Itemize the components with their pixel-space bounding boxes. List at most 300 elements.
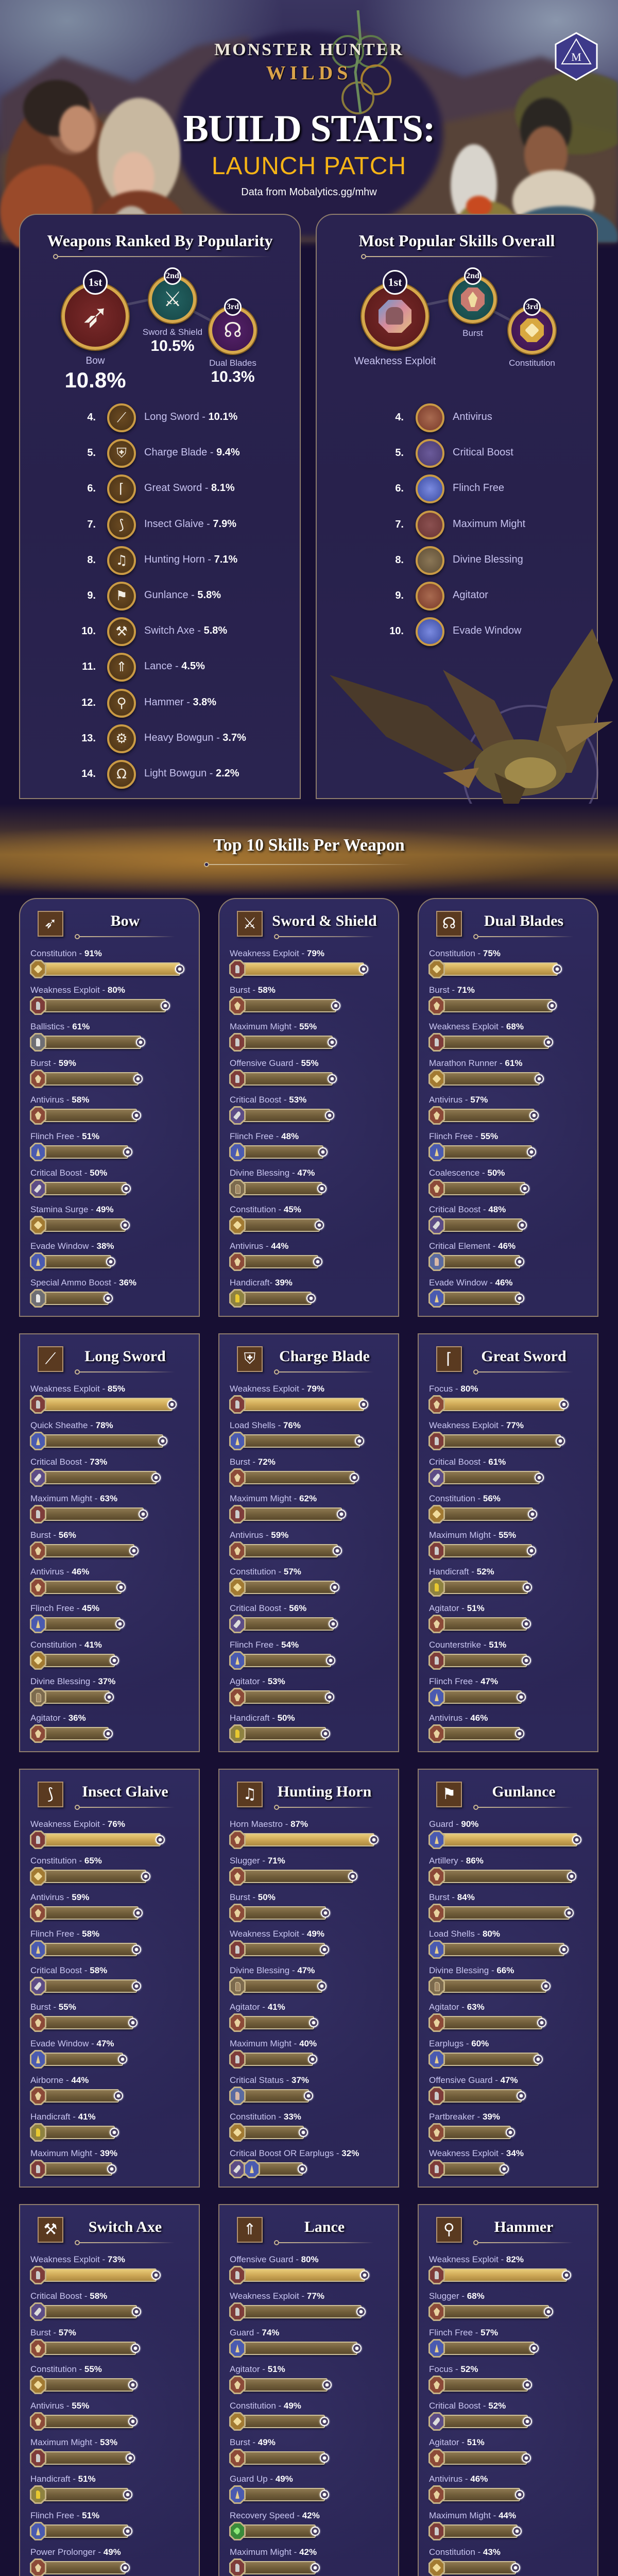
skill row: Maximum Might 42%: Maximum Might - 42%	[230, 2547, 317, 2557]
title divider	[55, 256, 271, 257]
skill row: Evade Window 47%	[20, 2038, 199, 2070]
rank 8: Divine Blessing: 8.	[395, 554, 404, 566]
skill row: Flinch Free 54%: Flinch Free - 54%	[230, 1640, 299, 1650]
podium 3rd: Constitution: 3rd	[526, 302, 538, 311]
skill row: Critical Boost OR Earplugs 32%	[219, 2147, 398, 2179]
rank 5: Charge Blade: ⛨	[116, 446, 127, 461]
skill row: Slugger 68%: Slugger - 68%	[429, 2291, 485, 2301]
skill row: Stamina Surge 49%: Stamina Surge - 49%	[30, 1205, 114, 1214]
skill row: Load Shells 80%	[419, 1928, 597, 1960]
rank 13: Heavy Bowgun: 13.	[81, 733, 96, 744]
skill row: Weakness Exploit 79%	[219, 1383, 398, 1415]
skill row: Power Prolonger 49%: Power Prolonger - 49%	[30, 2547, 121, 2557]
skill row: Burst 58%	[229, 985, 342, 1015]
podium 1st: Weakness Exploit: 1st	[388, 276, 402, 289]
weapon icon: ⌈	[446, 1350, 452, 1368]
rank 12: Hammer: 12.	[81, 697, 96, 708]
skill row: Burst 50%: Burst - 50%	[230, 1892, 276, 1902]
rank 4: Long Sword: 4.	[87, 412, 96, 423]
skill row: Weakness Exploit 73%	[20, 2253, 199, 2285]
rank 7: Maximum Might: 7.	[395, 519, 404, 530]
podium 2nd: Sword & Shield: 2nd	[166, 272, 179, 280]
skill row: Handicraft 39%	[219, 1277, 398, 1309]
rank 7: Insect Glaive: ⟆	[119, 517, 124, 533]
skill row: Flinch Free 51%: Flinch Free - 51%	[30, 1131, 99, 1141]
weapon title: Insect Glaive	[82, 1783, 168, 1800]
rank 9: Agitator: Agitator	[453, 589, 488, 601]
skill row: Critical Boost 53%: Critical Boost - 53%	[230, 1095, 306, 1105]
rank 9: Agitator: 9.	[395, 590, 404, 601]
skill row: Antivirus 46%: Antivirus - 46%	[429, 1713, 488, 1723]
skill row: Flinch Free 57%	[419, 2327, 597, 2359]
skill row: Maximum Might 62%	[219, 1493, 398, 1524]
panel: Bow	[19, 898, 200, 1317]
skill row: Antivirus 44%	[229, 1241, 323, 1271]
panel: Long Sword	[19, 1333, 200, 1752]
rank 8: Hunting Horn: Hunting Horn - 7.1%	[144, 554, 237, 565]
weapon icon: ☊	[442, 914, 456, 933]
section heading: top 10 skills per weapon: Top 10 Skills Per Weapon	[213, 836, 405, 855]
skill row: Agitator 53%: Agitator - 53%	[230, 1676, 285, 1686]
rank 5: Charge Blade: 5.	[87, 447, 96, 459]
skill row: Divine Blessing 66%	[419, 1964, 597, 1996]
skill row: Burst 55%: Burst - 55%	[30, 2002, 76, 2012]
skill row: Burst 84%: Burst - 84%	[429, 1892, 475, 1902]
skill row: Slugger 68%	[419, 2290, 597, 2322]
skill row: Offensive Guard 55%: Offensive Guard - 55%	[230, 1058, 319, 1068]
rank 5: Critical Boost: 5.	[395, 447, 404, 459]
weapon icon	[436, 2217, 462, 2243]
skill row: Flinch Free 58%: Flinch Free - 58%	[30, 1929, 99, 1939]
skill row: Constitution 91%	[30, 948, 185, 978]
skill row: Constitution 43%	[419, 2546, 597, 2576]
skill row: Maximum Might 53%: Maximum Might - 53%	[30, 2437, 117, 2447]
rank 4: Long Sword: Long Sword - 10.1%	[144, 411, 237, 422]
skill row: Burst 71%: Burst - 71%	[429, 985, 475, 995]
skill row: Antivirus 58%: Antivirus - 58%	[30, 1095, 89, 1105]
skill row: Guard Up 49%	[219, 2473, 398, 2505]
skill row: Critical Boost 58%: Critical Boost - 58%	[30, 1965, 107, 1975]
skill row: Coalescence 50%	[419, 1167, 597, 1199]
skill row: Handicraft 51%: Handicraft - 51%	[30, 2474, 96, 2484]
skill row: Antivirus 59%: Antivirus - 59%	[230, 1530, 288, 1540]
skill row: Burst 50%	[219, 1891, 398, 1923]
weapon icon	[38, 911, 63, 937]
skill row: Constitution 33%: Constitution - 33%	[230, 2112, 301, 2122]
skill row: Agitator 36%	[20, 1712, 199, 1744]
skill row: Divine Blessing 37%: Divine Blessing - 37%	[30, 1676, 115, 1686]
skill row: Agitator 51%: Agitator - 51%	[230, 2364, 285, 2374]
rank 4: Antivirus: Antivirus	[453, 411, 492, 422]
skill row: Guard 90%	[419, 1818, 597, 1850]
skill row: Constitution 33%	[219, 2111, 398, 2143]
skill row: Handicraft 52%	[419, 1566, 597, 1598]
skill row: Coalescence 50%: Coalescence - 50%	[429, 1168, 505, 1178]
skill row: Ballistics 61%	[30, 1022, 146, 1052]
skill row: Critical Boost 50%: Critical Boost - 50%	[30, 1168, 107, 1178]
weapon title: Long Sword	[84, 1348, 166, 1365]
panel: weapons ranked by popularity	[19, 214, 301, 799]
skill row: Antivirus 46%	[419, 1712, 597, 1744]
rank 8: Hunting Horn	[87, 546, 237, 578]
skill row: Constitution 55%: Constitution - 55%	[30, 2364, 102, 2374]
skill row: Critical Boost 56%: Critical Boost - 56%	[230, 1603, 306, 1613]
skill row: Flinch Free 51%	[20, 2510, 199, 2541]
header background scene	[0, 0, 618, 242]
skill row: Critical Boost 56%	[219, 1602, 398, 1634]
skill row: Critical Boost 58%: Critical Boost - 58%	[30, 2291, 107, 2301]
weapon icon: ⇑	[243, 2221, 256, 2239]
podium 1st: Bow: 10.8%	[64, 368, 126, 392]
rank 9: Gunlance: ⚑	[115, 588, 128, 604]
skill row: Weakness Exploit 68%: Weakness Exploit - 68%	[429, 1022, 524, 1031]
podium 2nd: Sword & Shield: 10.5%	[150, 337, 195, 354]
skill row: Weakness Exploit 77%	[219, 2290, 398, 2322]
rank 10: Evade Window: Evade Window	[453, 625, 521, 636]
skill row: Flinch Free 51%	[30, 1131, 134, 1161]
skill row: Antivirus 46%: Antivirus - 46%	[429, 2474, 488, 2484]
rank 7: Insect Glaive: 7.	[87, 519, 96, 530]
skill row: Critical Boost 73%: Critical Boost - 73%	[30, 1457, 107, 1467]
rank 6: Great Sword: 6.	[87, 483, 96, 494]
rank 7: Insect Glaive	[87, 511, 236, 542]
rank 5: Critical Boost: Critical Boost	[453, 447, 513, 458]
skill row: Burst 49%	[219, 2436, 398, 2468]
skill row: Load Shells 80%: Load Shells - 80%	[429, 1929, 500, 1939]
rank 10: Evade Window: 10.	[389, 625, 404, 637]
weapon title: Switch Axe	[89, 2218, 162, 2235]
skill row: Agitator 51%	[419, 2436, 597, 2468]
podium 2nd: Sword & Shield	[143, 267, 202, 354]
podium 2nd: Sword & Shield: Sword & Shield	[143, 327, 202, 337]
skill row: Critical Element 46%	[419, 1240, 597, 1272]
skill row: Burst 59%	[30, 1058, 144, 1088]
title: Monster Hunter Wilds logo text: MONSTER HUNTER	[214, 40, 404, 59]
skill row: Agitator 36%: Agitator - 36%	[30, 1713, 86, 1723]
podium 3rd: Constitution: Constitution	[509, 358, 555, 368]
rank 7: Maximum Might: Maximum Might	[453, 518, 525, 530]
skill row: Burst 84%	[419, 1891, 597, 1923]
rank 11: Lance: ⇑	[116, 659, 127, 675]
skill row: Maximum Might 63%	[20, 1493, 199, 1524]
weapon icon	[38, 1782, 63, 1807]
skill row: Ballistics 61%: Ballistics - 61%	[30, 1022, 90, 1031]
weapon icon	[436, 911, 462, 937]
rank 13: Heavy Bowgun	[20, 723, 300, 754]
skill row: Maximum Might 40%	[219, 2038, 398, 2070]
rank 9: Gunlance: Gunlance - 5.8%	[144, 589, 221, 601]
skill row: Burst 72%	[219, 1456, 398, 1488]
podium 3rd: Constitution	[506, 298, 558, 368]
skill row: Burst 57%: Burst - 57%	[30, 2328, 76, 2337]
skill row: Constitution 45%	[229, 1205, 325, 1234]
skill row: Agitator 41%	[219, 2001, 398, 2033]
skill row: Divine Blessing 47%	[219, 1964, 398, 1996]
weapon icon	[436, 1346, 462, 1372]
weapon title: Lance	[304, 2218, 345, 2235]
skill row: Recovery Speed 42%: Recovery Speed - 42%	[230, 2511, 320, 2520]
grassland backdrop	[0, 804, 618, 896]
weapon icon: ⚒	[44, 2221, 57, 2239]
rank 5: Charge Blade	[87, 439, 240, 471]
skill row: Airborne 44%	[20, 2074, 199, 2106]
skill row: Constitution 57%	[219, 1566, 398, 1598]
skill row: Weakness Exploit 77%: Weakness Exploit - 77%	[230, 2291, 324, 2301]
skill row: Handicraft 41%	[20, 2111, 199, 2143]
weapon icon	[237, 1346, 263, 1372]
skill row: Antivirus 55%	[20, 2400, 199, 2432]
panel: Great Sword	[418, 1333, 598, 1752]
skill row: Artillery 86%: Artillery - 86%	[429, 1856, 484, 1866]
skill row: Handicraft 51%	[20, 2473, 199, 2505]
subheading: Launch Patch: LAUNCH PATCH	[212, 152, 406, 180]
skill row: Burst 72%: Burst - 72%	[230, 1457, 276, 1467]
weapon icon: ⟋	[45, 1350, 56, 1368]
skill row: Load Shells 76%	[219, 1419, 398, 1451]
podium 3rd: Dual Blades: Dual Blades	[209, 358, 256, 368]
skill row: Artillery 86%	[419, 1855, 597, 1887]
character art: left hunters	[0, 78, 183, 249]
skill row: Special Ammo Boost 36%	[30, 1278, 136, 1308]
skill row: Flinch Free 48%	[229, 1131, 329, 1161]
rank 8: Divine Blessing: Divine Blessing	[453, 554, 523, 565]
rank 10: Switch Axe	[81, 617, 227, 649]
skill row: Maximum Might 55%: Maximum Might - 55%	[429, 1530, 516, 1540]
skill row: Weakness Exploit 82%: Weakness Exploit - 82%	[429, 2255, 524, 2264]
skill row: Burst 58%: Burst - 58%	[230, 985, 276, 995]
skill row: Maximum Might 40%: Maximum Might - 40%	[230, 2039, 317, 2048]
skill row: Weakness Exploit 77%: Weakness Exploit - 77%	[429, 1420, 524, 1430]
rank 8: Hunting Horn: 8.	[87, 554, 96, 566]
panel: Insect Glaive	[19, 1769, 200, 2188]
skill row: Weakness Exploit 80%	[30, 985, 171, 1015]
skill row: Maximum Might 62%: Maximum Might - 62%	[230, 1494, 317, 1503]
panel: Hammer	[418, 2204, 598, 2576]
rank 11: Lance: Lance - 4.5%	[144, 660, 205, 672]
skill row: Quick Sheathe 78%	[20, 1419, 199, 1451]
icon: mobalytics logo	[555, 32, 597, 81]
panel: Dual Blades	[418, 898, 598, 1317]
skill row: Counterstrike 51%	[419, 1639, 597, 1671]
skill row: Critical Boost 53%	[229, 1095, 336, 1125]
skill row: Maximum Might 42%	[219, 2546, 398, 2576]
skill row: Antivirus 46%	[20, 1566, 199, 1598]
skill row: Maximum Might 53%	[20, 2436, 199, 2468]
skill row: Maximum Might 55%: Maximum Might - 55%	[230, 1022, 317, 1031]
heading divider	[206, 864, 412, 865]
connector lines	[317, 215, 599, 369]
rank 10: Switch Axe: Switch Axe - 5.8%	[144, 625, 227, 636]
rank 10: Switch Axe: 10.	[81, 625, 96, 637]
skill row: Constitution 45%: Constitution - 45%	[230, 1205, 301, 1214]
podium 3rd: Dual Blades: 3rd	[227, 302, 239, 311]
skill row: Horn Maestro 87%: Horn Maestro - 87%	[230, 1819, 308, 1829]
weapon icon: ⛨	[244, 1350, 255, 1368]
skill row: Recovery Speed 42%	[219, 2510, 398, 2541]
skill row: Slugger 71%: Slugger - 71%	[230, 1856, 285, 1866]
skill row: Handicraft 52%: Handicraft - 52%	[429, 1567, 494, 1577]
skill row: Antivirus 46%	[419, 2473, 597, 2505]
skill row: Marathon Runner 61%: Marathon Runner - 61%	[429, 1058, 522, 1068]
skill row: Constitution 49%: Constitution - 49%	[230, 2401, 301, 2411]
icon: mobalytics logo: M	[571, 50, 581, 63]
skill row: Quick Sheathe 78%: Quick Sheathe - 78%	[30, 1420, 113, 1430]
skill row: Evade Window 38%: Evade Window - 38%	[30, 1241, 114, 1251]
skill row: Constitution 56%	[419, 1493, 597, 1524]
skill row: Handicraft 39%: Handicraft- 39%	[230, 1278, 293, 1287]
rank 6: Great Sword	[87, 474, 235, 506]
rank 11: Lance	[82, 653, 205, 684]
rank 11: Lance: 11.	[82, 661, 96, 672]
skill row: Load Shells 76%: Load Shells - 76%	[230, 1420, 301, 1430]
rank 9: Gunlance	[87, 582, 221, 613]
podium 3rd: Dual Blades	[207, 298, 259, 385]
skill row: Weakness Exploit 80%: Weakness Exploit - 80%	[30, 985, 125, 995]
skill row: Earplugs 60%: Earplugs - 60%	[429, 2039, 489, 2048]
skill row: Burst 56%	[20, 1529, 199, 1561]
skill row: Maximum Might 39%: Maximum Might - 39%	[30, 2148, 117, 2158]
skill row: Constitution 41%	[20, 1639, 199, 1671]
skill row: Flinch Free 58%	[20, 1928, 199, 1960]
podium 1st: Bow: ➶	[81, 297, 109, 335]
skill row: Divine Blessing 47%: Divine Blessing - 47%	[230, 1168, 315, 1178]
skill row: Maximum Might 44%: Maximum Might - 44%	[429, 2511, 516, 2520]
rank 14: Light Bowgun: Light Bowgun - 2.2%	[144, 768, 239, 779]
rank 9: Gunlance: 9.	[87, 590, 96, 601]
skill row: Weakness Exploit 73%: Weakness Exploit - 73%	[30, 2255, 125, 2264]
podium 1st: Bow: Bow	[86, 355, 105, 366]
skill row: Constitution 91%: Constitution - 91%	[30, 948, 102, 958]
skill row: Constitution 56%: Constitution - 56%	[429, 1494, 501, 1503]
heading: Build Stats: BUILD STATS:	[183, 108, 435, 150]
weapon title: Sword & Shield	[272, 912, 377, 929]
skill row: Earplugs 60%	[419, 2038, 597, 2070]
skill row: Weakness Exploit 68%	[419, 1021, 597, 1053]
rank 6: Flinch Free	[317, 473, 597, 504]
panel: Charge Blade	[218, 1333, 399, 1752]
skill row: Critical Boost 58%	[20, 1964, 199, 1996]
skill row: Burst 56%: Burst - 56%	[30, 1530, 76, 1540]
skill row: Antivirus 58%	[30, 1095, 142, 1125]
weapon icon: ♫	[243, 1785, 256, 1803]
rank 6: Great Sword: ⌈	[119, 481, 124, 497]
panel: Hunting Horn	[218, 1769, 399, 2188]
skill row: Guard Up 49%: Guard Up - 49%	[230, 2474, 293, 2484]
rank 8: Hunting Horn: ♫	[115, 553, 128, 568]
skill row: Antivirus 46%: Antivirus - 46%	[30, 1567, 89, 1577]
skill row: Handicraft 41%: Handicraft - 41%	[30, 2112, 96, 2122]
skill row: Constitution 49%	[219, 2400, 398, 2432]
skill row: Weakness Exploit 79%	[229, 948, 370, 978]
weapon title: Dual Blades	[484, 912, 563, 929]
skill row: Agitator 53%	[219, 1675, 398, 1707]
skill row: Constitution 55%	[20, 2363, 199, 2395]
rank 5: Critical Boost	[317, 438, 597, 469]
skill row: Critical Boost 52%	[419, 2400, 597, 2432]
rank 4: Antivirus: 4.	[395, 412, 404, 423]
rank 7: Insect Glaive: Insect Glaive - 7.9%	[144, 518, 236, 530]
title divider	[363, 256, 554, 257]
panel: Lance	[218, 2204, 399, 2576]
skill row: Maximum Might 39%	[20, 2147, 199, 2179]
skill row: Maximum Might 63%: Maximum Might - 63%	[30, 1494, 117, 1503]
skill row: Handicraft 50%	[219, 1712, 398, 1744]
skill row: Agitator 51%	[419, 1602, 597, 1634]
skill row: Offensive Guard 47%	[419, 2074, 597, 2106]
skill row: Critical Status 37%	[219, 2074, 398, 2106]
rank 9: Agitator	[317, 581, 597, 612]
skill row: Burst 57%	[20, 2327, 199, 2359]
podium 1st: Bow: 1st	[89, 276, 102, 289]
title: Wilds: WILDS	[266, 62, 352, 84]
skill row: Constitution 65%: Constitution - 65%	[30, 1856, 102, 1866]
skill row: Flinch Free 55%: Flinch Free - 55%	[429, 1131, 498, 1141]
skill row: Critical Element 46%: Critical Element - 46%	[429, 1241, 516, 1251]
skill row: Guard 90%: Guard - 90%	[429, 1819, 478, 1829]
weapon icon	[237, 2217, 263, 2243]
skill row: Critical Boost 52%: Critical Boost - 52%	[429, 2401, 506, 2411]
skill row: Burst 71%	[419, 984, 597, 1016]
skill row: Focus 52%	[419, 2363, 597, 2395]
skill row: Offensive Guard 47%: Offensive Guard - 47%	[429, 2075, 518, 2085]
rank 10: Switch Axe: ⚒	[115, 624, 128, 639]
weapon title: Bow	[111, 912, 140, 929]
weapon icon: ➶	[44, 914, 57, 933]
skill row: Flinch Free 57%: Flinch Free - 57%	[429, 2328, 498, 2337]
skill row: Constitution 75%: Constitution - 75%	[429, 948, 501, 958]
skill row: Weakness Exploit 77%	[419, 1419, 597, 1451]
skill row: Constitution 75%	[419, 947, 597, 979]
skill row: Flinch Free 47%	[419, 1675, 597, 1707]
skill row: Agitator 51%	[219, 2363, 398, 2395]
podium 2nd: Sword & Shield: ⚔	[163, 287, 182, 311]
skill row: Special Ammo Boost 36%: Special Ammo Boost - 36%	[30, 1278, 136, 1287]
rank 12: Hammer	[20, 688, 300, 719]
skill row: Flinch Free 47%: Flinch Free - 47%	[429, 1676, 498, 1686]
skill row: Handicraft 50%: Handicraft - 50%	[230, 1713, 295, 1723]
skill row: Flinch Free 45%: Flinch Free - 45%	[30, 1603, 99, 1613]
source text: Data from Mobalytics.gg/mhw	[241, 187, 377, 198]
skill row: Partbreaker 39%	[419, 2111, 597, 2143]
skill row: Critical Boost 58%	[20, 2290, 199, 2322]
skill row: Flinch Free 54%	[219, 1639, 398, 1671]
panel title: Most Popular Skills Overall	[359, 231, 555, 250]
rank 6: Flinch Free: 6.	[395, 483, 404, 494]
weapon icon	[237, 1782, 263, 1807]
weapon icon	[436, 1782, 462, 1807]
rank 4: Long Sword	[87, 403, 237, 435]
rank 13: Heavy Bowgun: Heavy Bowgun - 3.7%	[144, 732, 246, 743]
podium 2nd: Burst: 2nd	[466, 272, 479, 280]
skill row: Agitator 41%: Agitator - 41%	[230, 2002, 285, 2012]
skill row: Agitator 63%	[419, 2001, 597, 2033]
skill row: Offensive Guard 80%: Offensive Guard - 80%	[230, 2255, 319, 2264]
skill row: Maximum Might 55%	[419, 1529, 597, 1561]
skill row: Divine Blessing 37%	[20, 1675, 199, 1707]
podium 1st: Bow	[60, 270, 131, 392]
skill row: Counterstrike 51%: Counterstrike - 51%	[429, 1640, 506, 1650]
skill row: Stamina Surge 49%	[30, 1205, 131, 1234]
skill row: Agitator 63%: Agitator - 63%	[429, 2002, 485, 2012]
skill row: Flinch Free 45%	[20, 1602, 199, 1634]
skill row: Divine Blessing 47%: Divine Blessing - 47%	[230, 1965, 315, 1975]
skill row: Focus 80%: Focus - 80%	[429, 1384, 478, 1394]
weapon title: Gunlance	[492, 1783, 556, 1800]
skill row: Constitution 43%: Constitution - 43%	[429, 2547, 501, 2557]
skill row: Antivirus 57%: Antivirus - 57%	[429, 1095, 488, 1105]
rank 10: Evade Window	[317, 616, 597, 647]
rank 5: Charge Blade: Charge Blade - 9.4%	[144, 447, 240, 458]
